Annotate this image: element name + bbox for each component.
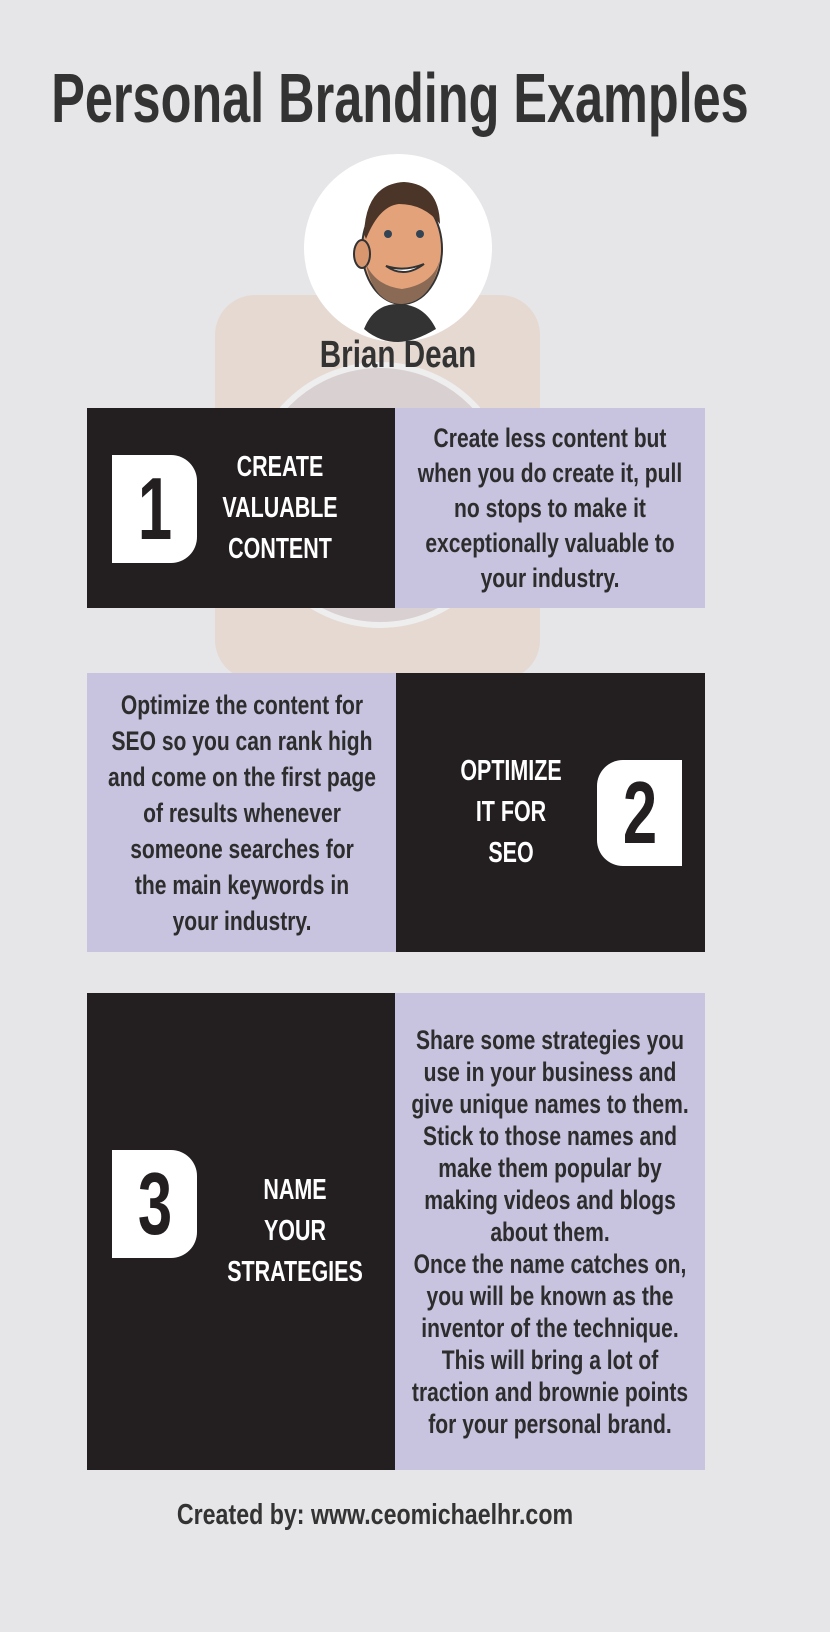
badge 2 (597, 760, 682, 866)
text 3: traction and brownie points (412, 1376, 688, 1406)
text 3 (395, 993, 705, 1470)
footer: Created by: www.ceomichaelhr.com (177, 1498, 573, 1530)
text 2: someone searches for (130, 834, 353, 864)
text 3: use in your business and (424, 1056, 676, 1086)
panel 2 (87, 673, 705, 952)
portrait (304, 154, 492, 342)
text 3: make them popular by (438, 1152, 662, 1182)
label 2: SEO (488, 837, 534, 869)
badge 3: 3 (137, 1154, 172, 1253)
text 3: for your personal brand. (428, 1408, 672, 1438)
text 2 (87, 673, 396, 952)
text 1 (395, 408, 705, 608)
panel 1 dark side (87, 408, 395, 608)
text 2: SEO so you can rank high (111, 726, 372, 756)
text 3: This will bring a lot of (442, 1344, 658, 1374)
text 1: Create less content but (434, 422, 666, 452)
text 2: Optimize the content for (120, 690, 363, 720)
text 1: no stops to make it (454, 492, 646, 522)
panel 3 dark side (87, 993, 395, 1470)
text 3: you will be known as the (427, 1280, 673, 1310)
label 1: VALUABLE (222, 492, 338, 524)
badge 1: 1 (137, 459, 172, 558)
text 3: Stick to those names and (423, 1120, 677, 1150)
panel 3 (87, 993, 705, 1470)
label 1: CONTENT (228, 532, 332, 564)
name: Brian Dean (320, 334, 476, 376)
text 1: exceptionally valuable to (425, 528, 675, 558)
text 3: inventor of the technique. (421, 1312, 679, 1342)
text 2: of results whenever (143, 798, 340, 828)
panel 2 dark side (396, 673, 705, 952)
text 3: about them. (490, 1216, 610, 1246)
text 1: when you do create it, pull (418, 458, 682, 488)
label 2: IT FOR (476, 796, 546, 828)
text 3: making videos and blogs (424, 1184, 676, 1214)
label 3: NAME (263, 1174, 327, 1206)
label 3: YOUR (264, 1215, 326, 1247)
text 2: and come on the first page (108, 762, 375, 792)
text 3: give unique names to them. (411, 1088, 689, 1118)
badge 2: 2 (622, 763, 657, 862)
text 2: the main keywords in (134, 870, 349, 900)
title: Personal Branding Examples (51, 59, 749, 137)
label 3 (227, 1174, 363, 1288)
label 2 (460, 755, 562, 869)
label 3: STRATEGIES (227, 1256, 363, 1288)
text 1: your industry. (481, 562, 619, 592)
label 1 (222, 450, 338, 564)
text 2: your industry. (172, 906, 311, 936)
text 3: Share some strategies you (416, 1024, 684, 1054)
badge 1 (112, 455, 197, 563)
watermark logo (215, 295, 540, 673)
panel 1 (87, 408, 705, 608)
badge 3 (112, 1150, 197, 1258)
text 3: Once the name catches on, (414, 1248, 686, 1278)
label 2: OPTIMIZE (460, 755, 562, 787)
label 1: CREATE (237, 450, 323, 482)
